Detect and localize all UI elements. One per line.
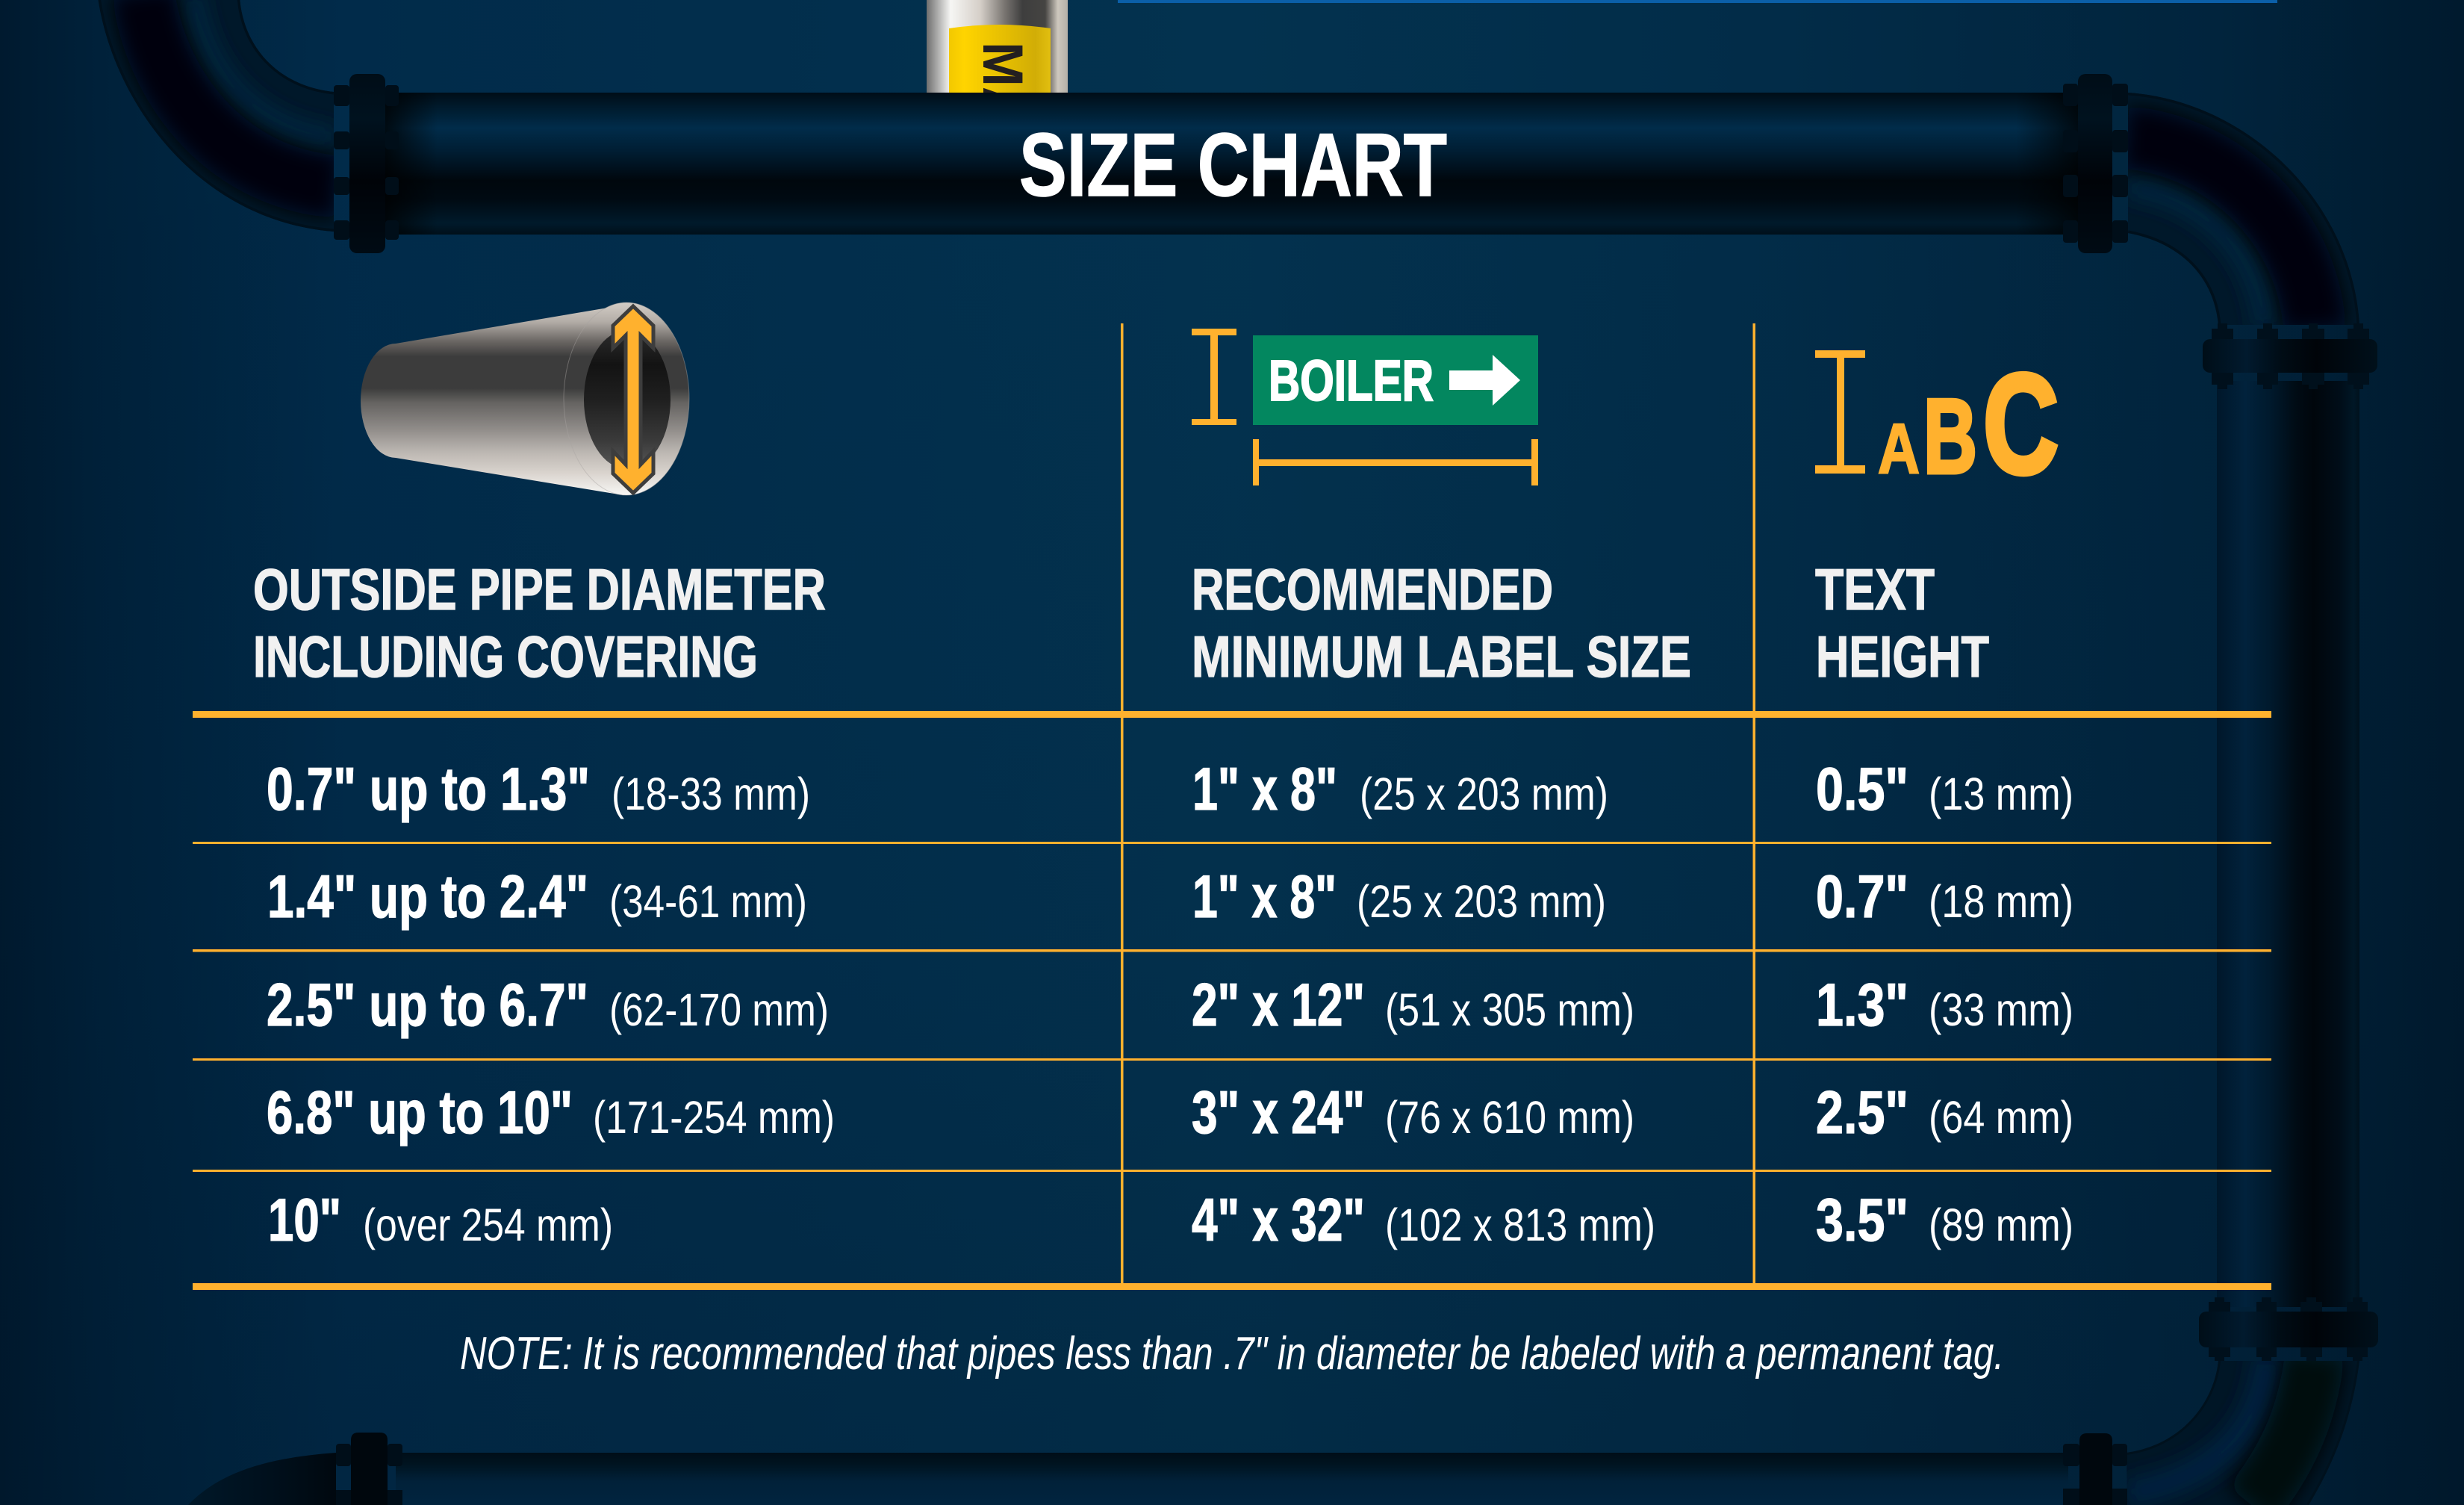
- row 2: (18 mm): [1929, 876, 2073, 927]
- row 3: 2" x 12": [1192, 972, 1365, 1039]
- header: recommended label size: RECOMMENDED: [1192, 556, 1553, 622]
- row 2: (25 x 203 mm): [1357, 876, 1606, 927]
- flange: top right: [2063, 74, 2128, 253]
- row 2: [267, 863, 2073, 931]
- icon: label size (boiler sign with dimension marks): [1192, 329, 1538, 485]
- row 5: 3.5": [1816, 1187, 1908, 1254]
- header: text height: HEIGHT: [1816, 624, 1989, 689]
- row 2: (34-61 mm): [609, 876, 807, 927]
- row 4: (76 x 610 mm): [1385, 1092, 1634, 1143]
- row 3: 2.5" up to 6.7": [267, 972, 588, 1039]
- row 5: (102 x 813 mm): [1385, 1200, 1655, 1250]
- height bracket: [1815, 350, 1865, 474]
- row 4: 3" x 24": [1192, 1079, 1365, 1146]
- row 1: 1" x 8": [1192, 756, 1337, 823]
- row 2: 1.4" up to 2.4": [267, 863, 588, 931]
- icon: metal pipe with yellow label: MA: [971, 42, 1034, 125]
- row 5: (over 254 mm): [363, 1200, 613, 1250]
- row 3: [267, 972, 2073, 1039]
- row 4: 6.8" up to 10": [267, 1079, 573, 1146]
- flange: top left: [334, 74, 399, 253]
- row 4: (64 mm): [1929, 1092, 2073, 1143]
- elbow: bottom right: [2121, 1356, 2367, 1505]
- table rules: [193, 711, 2271, 1290]
- header: text height: [1815, 556, 1989, 689]
- row 4: (171-254 mm): [593, 1092, 835, 1143]
- vertical pipe: [2217, 381, 2359, 1307]
- row 3: (51 x 305 mm): [1385, 984, 1634, 1035]
- note: NOTE: It is recommended that pipes less than .7" in diameter be labeled with a permanent tag.: [460, 1328, 2004, 1380]
- ABC letters: C: [1983, 345, 2059, 503]
- header: text height: TEXT: [1815, 556, 1935, 622]
- row 5: [268, 1187, 2073, 1254]
- row 5: 4" x 32": [1192, 1187, 1365, 1254]
- elbow: top left: [99, 0, 334, 232]
- width bracket: [1253, 439, 1538, 485]
- ABC letters: B: [1923, 377, 1977, 496]
- icon: pipe diameter with double arrow: [361, 302, 689, 495]
- column headers: [253, 556, 1989, 689]
- row 5: (89 mm): [1929, 1200, 2073, 1250]
- ABC letters: A: [1878, 409, 1920, 488]
- flange: bottom right: [2063, 1433, 2127, 1505]
- height bracket: [1192, 329, 1236, 425]
- bottom horizontal pipe: [396, 1453, 2068, 1505]
- icon: text height ABC: [1815, 345, 2059, 503]
- row 1: 0.7" up to 1.3": [267, 756, 590, 823]
- row 2: 1" x 8": [1192, 863, 1337, 931]
- header: outside pipe diameter: OUTSIDE PIPE DIAMETER: [253, 556, 826, 622]
- elbow: bottom left: [188, 1453, 336, 1505]
- column dividers: [1121, 323, 1755, 1284]
- row 4: [267, 1079, 2073, 1146]
- ABC letters: [1878, 345, 2059, 503]
- row 1: (13 mm): [1929, 769, 2073, 819]
- row 3: 1.3": [1816, 972, 1908, 1039]
- title: SIZE CHART: [1019, 115, 1447, 215]
- elbow: top right: [2128, 93, 2359, 325]
- header: recommended label size: MINIMUM LABEL SIZE: [1192, 624, 1691, 689]
- row 4: 2.5": [1816, 1079, 1908, 1146]
- blue bar at top edge: [1118, 0, 2277, 3]
- header: recommended label size: [1192, 556, 1691, 689]
- row 2: 0.7": [1816, 863, 1908, 931]
- header: outside pipe diameter: [253, 556, 826, 689]
- row 1: 0.5": [1816, 756, 1908, 823]
- table rows: [267, 756, 2073, 1254]
- flange: vertical lower: [2199, 1297, 2378, 1361]
- header: outside pipe diameter: INCLUDING COVERING: [253, 624, 758, 689]
- flange: bottom left: [336, 1433, 402, 1505]
- green BOILER sign: [1253, 335, 1538, 425]
- row 5: 10": [268, 1187, 341, 1254]
- green BOILER sign: BOILER: [1269, 349, 1434, 413]
- icon: metal pipe with yellow label: [927, 0, 1068, 93]
- row 1: (25 x 203 mm): [1360, 769, 1608, 819]
- row 1: (18-33 mm): [612, 769, 810, 819]
- row 3: (33 mm): [1929, 984, 2073, 1035]
- row 1: [267, 756, 2073, 823]
- row 3: (62-170 mm): [609, 984, 829, 1035]
- flange: vertical upper: [2203, 323, 2377, 389]
- top horizontal pipe: [381, 93, 2083, 235]
